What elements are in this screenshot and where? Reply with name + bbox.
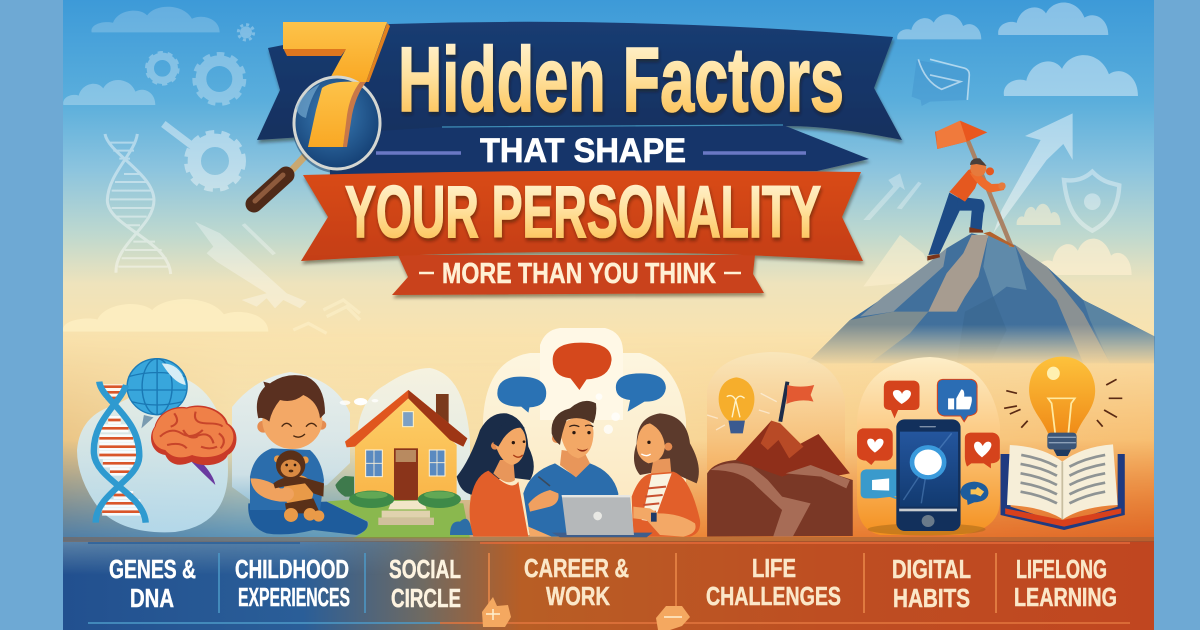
title banner: number seven (283, 22, 390, 82)
icon: career and work group of three people with laptop (450, 393, 700, 537)
tagline: more than you think: MORE THAN YOU THINK (442, 258, 716, 290)
label: genes and DNA (109, 554, 196, 613)
label: social circle: SOCIAL (389, 554, 461, 584)
label: digital habits: DIGITAL (892, 554, 971, 584)
label: childhood experiences: EXPERIENCES (238, 582, 350, 612)
icon: phone with social media reactions (857, 379, 1000, 535)
label: career and work: WORK (546, 581, 610, 611)
bottom label band (63, 537, 1154, 630)
label: lifelong learning: LEARNING (1014, 582, 1117, 612)
icon: lightbulb and open book (1001, 357, 1125, 530)
background sky and gradient (63, 0, 1154, 541)
man center (523, 401, 618, 537)
title: your personality: YOUR PERSONALITY (345, 172, 821, 253)
laptop (552, 495, 653, 537)
icon: speech bubbles above group (497, 343, 666, 413)
label: life challenges: CHALLENGES (706, 581, 841, 611)
teddy (273, 450, 324, 522)
label: digital habits (892, 554, 971, 613)
globe (127, 359, 187, 428)
label: social circle: CIRCLE (391, 583, 461, 613)
dna (94, 382, 146, 523)
label: social circle (389, 554, 461, 613)
title banner: magnifying glass (254, 77, 382, 204)
label: digital habits: HABITS (893, 583, 970, 613)
left background decorations: clouds, gears, DNA (63, 7, 360, 333)
speech bubble outline (912, 59, 969, 106)
title banner: red ribbon (301, 171, 863, 295)
label: career and work: CAREER & (524, 553, 629, 583)
woman left (457, 413, 559, 537)
label: genes and DNA: DNA (130, 583, 174, 613)
label: lifelong learning (1014, 554, 1117, 612)
title: hidden factors: Hidden Factors (398, 29, 844, 131)
label: lifelong learning: LIFELONG (1016, 554, 1107, 584)
label: life challenges: LIFE (752, 553, 796, 583)
icon: DNA helix, globe and brain (94, 359, 237, 523)
woman right (632, 413, 700, 537)
label: childhood experiences (235, 554, 350, 612)
brain (151, 406, 237, 485)
label: childhood experiences: CHILDHOOD (235, 554, 349, 584)
reaction bubbles (857, 379, 1000, 505)
illustration backdrop panels (77, 328, 1000, 535)
mountain with climber (807, 121, 1155, 363)
icon: life challenges mountain and bulb (707, 377, 853, 537)
label: life challenges (706, 553, 841, 611)
icon: child with teddy bear (248, 375, 368, 535)
icon: house (327, 390, 470, 538)
right background decorations: clouds, speech bubble, arrow, shield (863, 2, 1138, 287)
subtitle: that shape: THAT SHAPE (480, 132, 686, 170)
label: career and work (524, 553, 629, 611)
label: genes and DNA: GENES & (109, 554, 196, 584)
climber figure (927, 121, 1015, 261)
title banner: navy ribbon (257, 22, 902, 178)
decorative star badges (482, 597, 690, 630)
